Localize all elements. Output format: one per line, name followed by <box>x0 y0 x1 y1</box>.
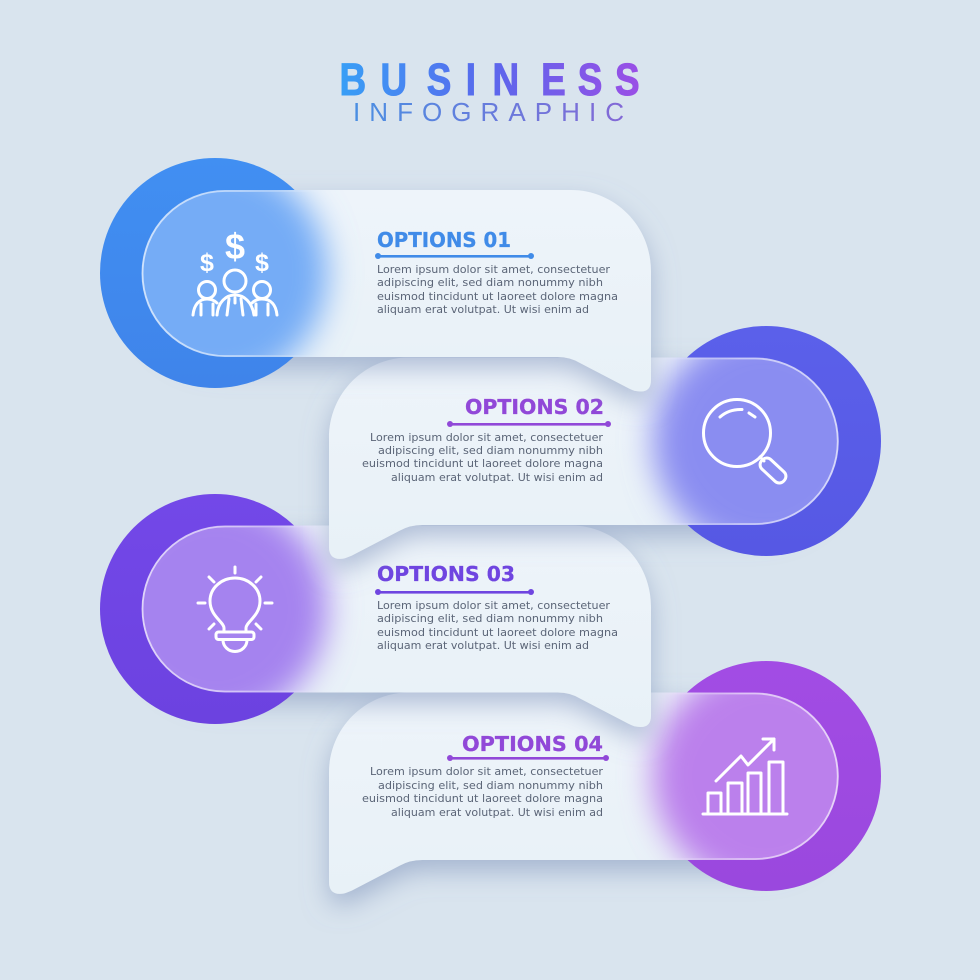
panel: option 3 <box>103 497 651 727</box>
icon: light bulb <box>198 567 272 652</box>
circle: option 2 <box>687 326 881 556</box>
text block: aliquam erat volutpat. Ut wisi enim ad <box>391 807 603 819</box>
circle: option 1 <box>100 158 294 388</box>
panel: option 4 <box>329 664 877 894</box>
text block <box>362 432 604 484</box>
title <box>339 55 640 127</box>
text block: Lorem ipsum dolor sit amet, consectetuer <box>377 600 611 612</box>
text block: euismod tincidunt ut laoreet dolore magna <box>362 793 603 805</box>
text block: Lorem ipsum dolor sit amet, consectetuer <box>377 264 611 276</box>
heading: options 01: OPTIONS 01 <box>377 228 511 252</box>
text block: aliquam erat volutpat. Ut wisi enim ad <box>377 640 589 652</box>
text block: aliquam erat volutpat. Ut wisi enim ad <box>391 472 603 484</box>
underline <box>447 421 611 427</box>
text block: euismod tincidunt ut laoreet dolore magna <box>377 627 618 639</box>
text block <box>362 766 604 819</box>
panel: option 1 <box>103 161 651 392</box>
icon: people with dollar signs: $ <box>225 226 245 267</box>
heading: options 02: OPTIONS 02 <box>465 395 604 419</box>
text block: Lorem ipsum dolor sit amet, consectetuer <box>370 766 604 778</box>
underline <box>375 589 534 595</box>
icon: people with dollar signs: $ <box>200 249 214 277</box>
icon: people with dollar signs: $ <box>255 249 269 277</box>
text block: aliquam erat volutpat. Ut wisi enim ad <box>377 304 589 316</box>
icon: bar chart with arrow <box>703 739 787 814</box>
circle: option 3 <box>100 494 294 724</box>
text block: euismod tincidunt ut laoreet dolore magna <box>362 458 603 470</box>
text block: euismod tincidunt ut laoreet dolore magna <box>377 291 618 303</box>
circle: option 4 <box>687 661 881 891</box>
underline <box>375 253 534 259</box>
panel: option 2 <box>329 329 877 559</box>
title: BUSINESS <box>339 55 640 105</box>
text block: adipiscing elit, sed diam nonummy nibh <box>378 445 603 457</box>
text block: adipiscing elit, sed diam nonummy nibh <box>377 613 603 625</box>
text block: adipiscing elit, sed diam nonummy nibh <box>378 780 603 792</box>
underline <box>447 755 609 761</box>
text block: Lorem ipsum dolor sit amet, consectetuer <box>370 432 604 444</box>
heading: options 04: OPTIONS 04 <box>462 732 603 756</box>
text block <box>377 264 618 316</box>
text block: adipiscing elit, sed diam nonummy nibh <box>377 277 603 289</box>
icon: magnifying glass <box>704 400 788 485</box>
heading: options 03: OPTIONS 03 <box>377 562 515 586</box>
text block <box>377 600 618 652</box>
icon: people with dollar signs <box>193 226 277 315</box>
subtitle: INFOGRAPHIC <box>353 97 624 127</box>
